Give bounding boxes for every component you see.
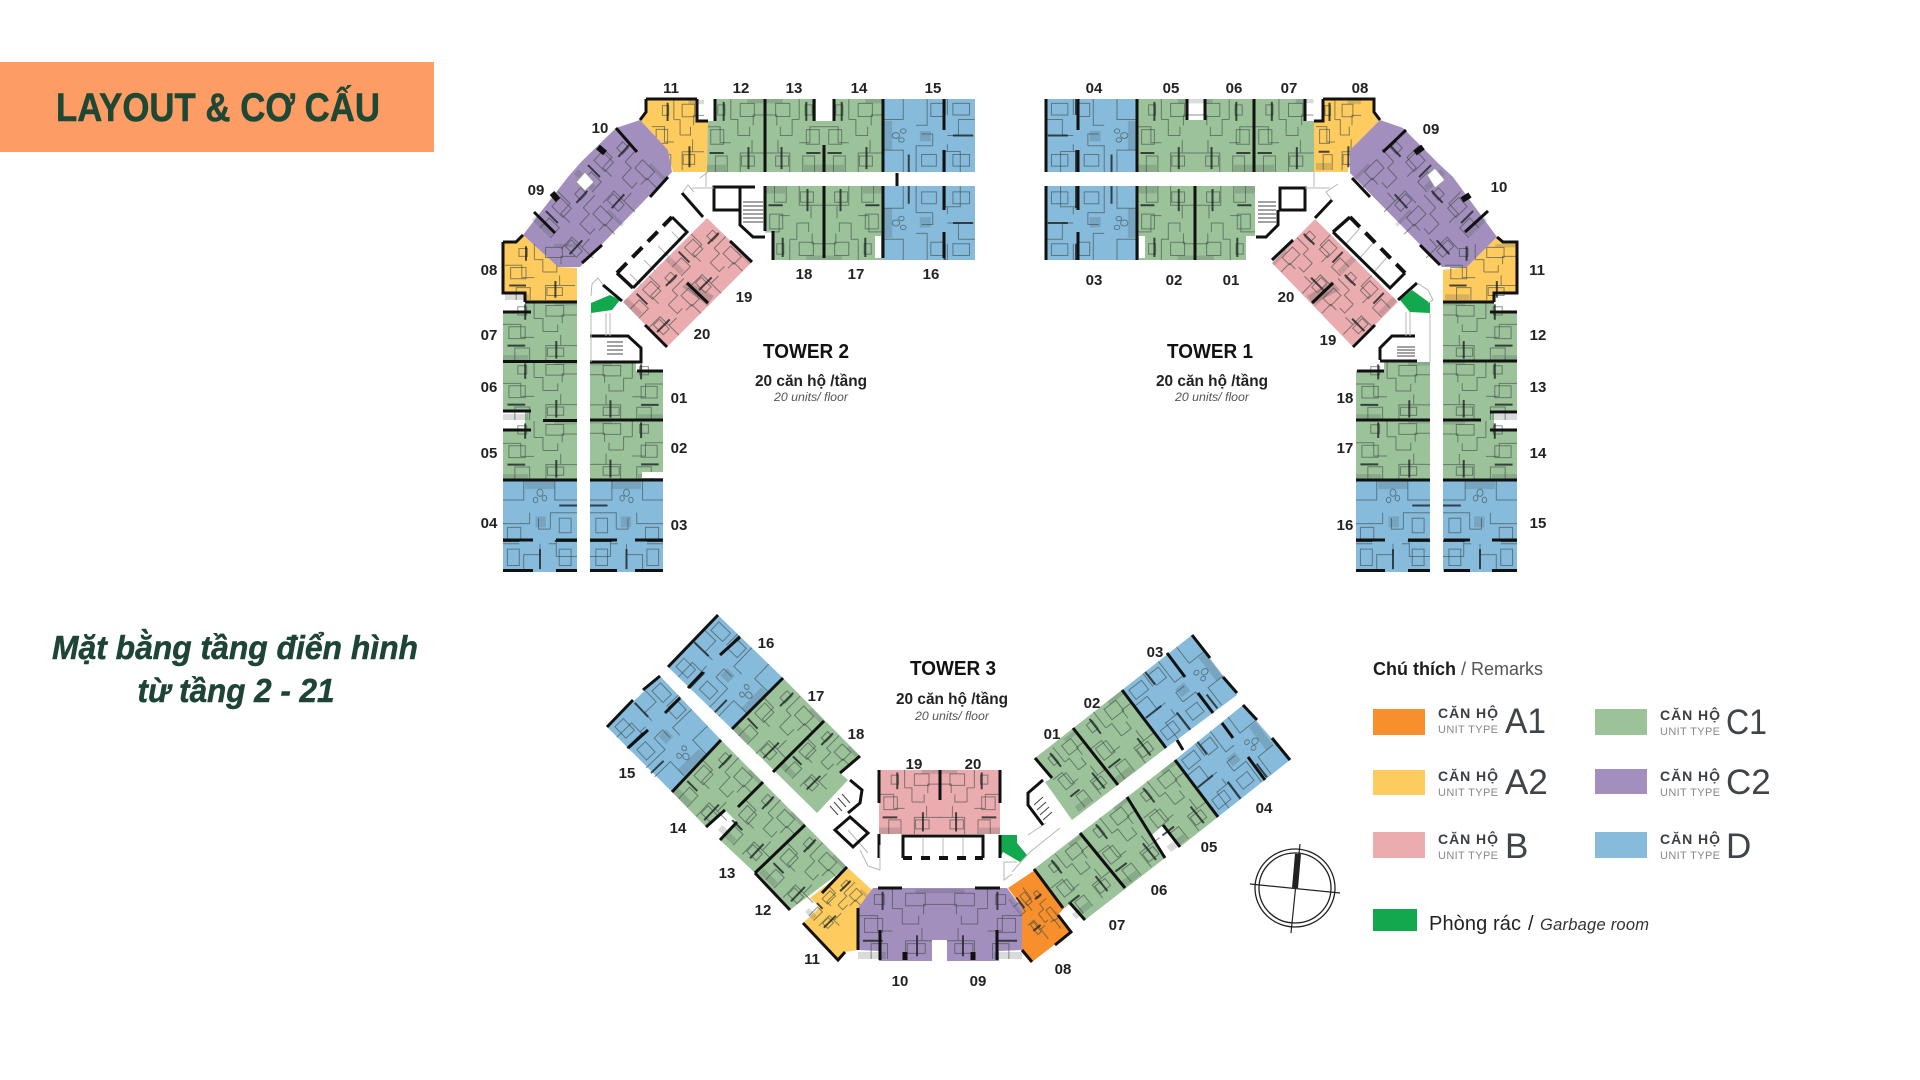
unit numbers: 11 (804, 951, 820, 968)
tower 1 caption: 20 units/ floor (1174, 390, 1250, 404)
unit numbers (481, 80, 941, 534)
unit numbers: 16 (923, 266, 939, 283)
unit numbers: 10 (592, 120, 608, 137)
unit numbers: 18 (1337, 390, 1353, 407)
thick wall stubs (905, 952, 973, 960)
units 01-02 type C1 (1137, 186, 1255, 260)
legend (1373, 659, 1771, 935)
unit numbers: 03 (671, 517, 687, 534)
subtitle: từ tầng 2 - 21 (138, 672, 334, 709)
units 17-18 type C1 (765, 186, 883, 260)
legend: garbage room: Garbage room (1540, 916, 1649, 934)
unit 16 type D (668, 615, 783, 730)
units 17-18 type C1 (1356, 362, 1430, 480)
legend: A1 (1373, 702, 1546, 741)
garbage room (591, 295, 620, 313)
unit numbers: 14 (851, 80, 868, 97)
units 09-10 type C2 (858, 888, 1022, 961)
legend: garbage room: / (1528, 913, 1534, 935)
legend: C1: CĂN HỘ (1660, 706, 1720, 723)
unit numbers: 19 (906, 756, 922, 773)
unit 11 type A2 (1443, 237, 1517, 302)
units 01-02 type C1 (1035, 690, 1166, 820)
tower 3 caption: TOWER 3 (910, 658, 996, 680)
unit numbers: 16 (1337, 517, 1353, 534)
unit numbers: 10 (892, 973, 908, 990)
unit numbers: 11 (1529, 262, 1545, 279)
unit numbers: 07 (1109, 917, 1125, 934)
floor plan: tower 2 (481, 80, 975, 572)
unit numbers: 13 (719, 865, 735, 882)
legend: D: CĂN HỘ (1660, 830, 1720, 847)
unit numbers: 11 (663, 80, 679, 97)
unit numbers: 01 (1223, 272, 1239, 289)
unit numbers: 12 (755, 902, 771, 919)
walls (503, 99, 944, 570)
unit 03 type D (1122, 635, 1237, 748)
lift core and stairs (830, 780, 1060, 880)
unit numbers: 17 (808, 688, 824, 705)
unit numbers: 07 (1281, 80, 1297, 97)
units 12-14 type C1 (672, 740, 847, 915)
unit 15 type D (1443, 480, 1517, 572)
unit numbers: 06 (481, 379, 497, 396)
units 19-20 type B (623, 218, 752, 347)
legend: D: D (1726, 827, 1751, 866)
subtitle (52, 629, 418, 709)
icon: compass (1250, 844, 1340, 933)
unit numbers: 15 (619, 765, 635, 782)
lift core and stairs (590, 172, 765, 362)
legend: D (1595, 827, 1751, 866)
unit numbers: 12 (1530, 327, 1546, 344)
legend: C2 (1595, 763, 1771, 802)
legend: C1: C1 (1726, 703, 1767, 742)
units 05-07 type C1 (503, 302, 577, 480)
tower 1 caption: 20 căn hộ /tầng (1156, 373, 1268, 390)
legend: D: UNIT TYPE (1660, 850, 1720, 862)
unit numbers: 18 (796, 266, 812, 283)
legend: C1 (1595, 703, 1767, 742)
legend: A2: UNIT TYPE (1438, 787, 1498, 799)
unit numbers: 20 (694, 326, 710, 343)
unit numbers: 07 (481, 327, 497, 344)
legend title: Chú thích / Remarks (1373, 659, 1543, 679)
unit numbers: 19 (1320, 332, 1336, 349)
unit numbers: 15 (925, 80, 941, 97)
units 12-14 type C1 (1443, 302, 1517, 480)
unit numbers: 02 (1084, 695, 1100, 712)
legend: C2: CĂN HỘ (1660, 767, 1720, 784)
unit numbers: 01 (671, 390, 687, 407)
unit 16 type D (1356, 480, 1430, 572)
walls (1046, 99, 1517, 570)
subtitle: Mặt bằng tầng điển hình (52, 629, 418, 666)
unit numbers: 08 (1352, 80, 1368, 97)
unit numbers (619, 635, 1273, 990)
legend: A1: UNIT TYPE (1438, 724, 1498, 736)
unit 04 type D (503, 480, 577, 572)
unit numbers: 04 (1256, 800, 1273, 817)
tower 3 caption: 20 units/ floor (914, 709, 990, 723)
legend: B: CĂN HỘ (1438, 830, 1498, 847)
tower 2 caption: 20 căn hộ /tầng (755, 373, 867, 390)
unit numbers: 08 (481, 262, 497, 279)
unit numbers: 05 (481, 445, 497, 462)
unit numbers: 09 (970, 973, 986, 990)
legend: A1: A1 (1505, 702, 1546, 741)
floor plan: tower 3 (607, 615, 1290, 990)
unit numbers: 08 (1055, 961, 1071, 978)
legend: garbage room (1373, 909, 1649, 935)
unit numbers: 12 (733, 80, 749, 97)
unit numbers: 18 (848, 726, 864, 743)
unit 08 type A1 (1008, 870, 1071, 962)
unit numbers: 15 (1530, 515, 1546, 532)
units 12-14 type C1 (706, 99, 883, 172)
legend: A2: A2 (1505, 763, 1548, 802)
unit numbers: 17 (848, 266, 864, 283)
unit numbers: 14 (670, 820, 687, 837)
legend: A2 (1373, 763, 1548, 802)
unit numbers (1086, 80, 1547, 534)
legend: A1: CĂN HỘ (1438, 704, 1498, 721)
units 19-20 type B (879, 770, 1000, 834)
unit numbers: 14 (1530, 445, 1547, 462)
unit numbers: 06 (1151, 882, 1167, 899)
units 15-16 type D (883, 99, 975, 260)
unit numbers: 04 (1086, 80, 1103, 97)
thick wall stubs (552, 147, 605, 200)
unit numbers: 03 (1147, 644, 1163, 661)
unit numbers: 06 (1226, 80, 1242, 97)
unit 11 type A2 (803, 868, 872, 960)
garbage room (1400, 290, 1430, 313)
unit numbers: 13 (786, 80, 802, 97)
header banner (0, 62, 434, 152)
units 09-10 type C2 (1350, 120, 1497, 270)
unit numbers: 09 (1423, 121, 1439, 138)
unit 11 type A2 (640, 99, 708, 172)
walls (607, 615, 1290, 962)
thick wall stubs (1415, 147, 1470, 200)
tower 2 caption: TOWER 2 (763, 341, 849, 363)
unit numbers: 05 (1201, 839, 1217, 856)
unit numbers: 02 (671, 440, 687, 457)
tower 1 caption: TOWER 1 (1167, 341, 1253, 363)
legend: C2: C2 (1726, 763, 1771, 802)
unit numbers: 02 (1166, 272, 1182, 289)
tower 2 caption: 20 units/ floor (773, 390, 849, 404)
tower 3 caption (896, 658, 1008, 723)
legend: garbage room: Phòng rác (1429, 913, 1521, 935)
tower 1 caption (1156, 341, 1268, 404)
unit numbers: 17 (1337, 440, 1353, 457)
legend: B: B (1505, 827, 1528, 866)
units 09-10 type C2 (523, 120, 672, 270)
garbage room (1000, 835, 1027, 862)
units 17-18 type C1 (732, 678, 860, 813)
unit numbers: 09 (528, 182, 544, 199)
unit numbers: 20 (1278, 289, 1294, 306)
unit numbers: 19 (736, 289, 752, 306)
unit numbers: 03 (1086, 272, 1102, 289)
unit numbers: 10 (1491, 179, 1507, 196)
units 01-02 type C1 (590, 362, 663, 480)
tower 3 caption: 20 căn hộ /tầng (896, 691, 1008, 708)
unit 03 type D (590, 480, 663, 572)
unit numbers: 04 (481, 515, 498, 532)
legend: A2: CĂN HỘ (1438, 767, 1498, 784)
unit numbers: 01 (1044, 726, 1060, 743)
units 05-07 type C1 (1137, 99, 1314, 172)
units 19-20 type B (1272, 219, 1398, 347)
units 05-07 type C1 (1034, 760, 1219, 920)
unit 15 type D (607, 676, 721, 792)
unit 08 type A2 (1314, 99, 1380, 172)
legend: B (1373, 827, 1528, 866)
legend: C1: UNIT TYPE (1660, 726, 1720, 738)
lift core and stairs (1256, 172, 1433, 362)
unit numbers: 16 (758, 635, 774, 652)
unit numbers: 13 (1530, 379, 1546, 396)
tower 2 caption (755, 341, 867, 404)
legend: B: UNIT TYPE (1438, 850, 1498, 862)
unit 08 type A2 (503, 235, 577, 302)
floor plan: tower 1 (1046, 80, 1547, 572)
header banner: LAYOUT & CƠ CẤU (56, 84, 380, 130)
unit numbers: 20 (965, 756, 981, 773)
unit numbers: 05 (1163, 80, 1179, 97)
legend: C2: UNIT TYPE (1660, 787, 1720, 799)
units 03-04 type D (1046, 99, 1137, 260)
unit 04 type D (1175, 705, 1290, 817)
